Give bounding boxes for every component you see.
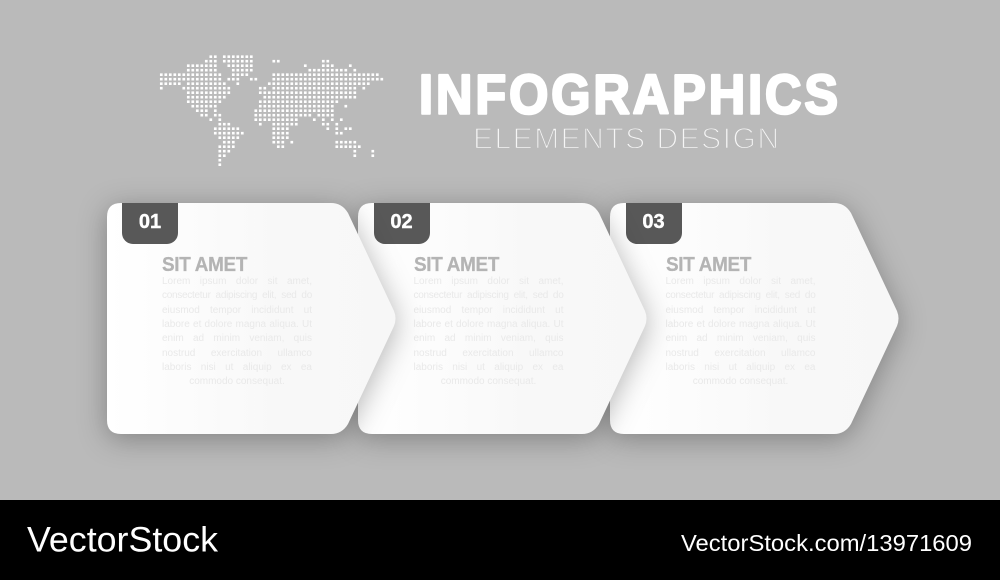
panel: step 03 xyxy=(599,194,910,453)
image url: VectorStock.com/13971609 xyxy=(681,530,972,556)
body text 03: commodo consequat. xyxy=(693,376,788,387)
body text 01: nostrud exercitation ullamco xyxy=(162,348,312,359)
panel: step 01 xyxy=(93,194,409,453)
body text 03: eiusmod tempor incididunt ut xyxy=(666,305,816,316)
body text 03: laboris nisi ut aliquip ex ea xyxy=(666,362,816,373)
body text 03: consectetur adipiscing elit, sed do xyxy=(666,290,816,301)
footer bar xyxy=(0,500,1000,580)
body text 01: Lorem ipsum dolor sit amet, xyxy=(162,276,312,287)
world map xyxy=(160,55,384,166)
body text 01: consectetur adipiscing elit, sed do xyxy=(162,290,312,301)
title: INFOGRAPHICS xyxy=(419,64,841,126)
body text 01: commodo consequat. xyxy=(189,376,285,387)
body text 02: eiusmod tempor incididunt ut xyxy=(414,305,564,316)
body text 02: consectetur adipiscing elit, sed do xyxy=(414,290,564,301)
heading 03: SIT AMET xyxy=(666,253,751,276)
arrow card shape 03 xyxy=(599,194,910,453)
body text 02: nostrud exercitation ullamco xyxy=(414,348,564,359)
arrow card shape 02 xyxy=(347,194,660,453)
number tab 01: 01 xyxy=(139,211,161,233)
body text 02: laboris nisi ut aliquip ex ea xyxy=(414,362,564,373)
brand name: VectorStock xyxy=(27,520,219,560)
number tab 02: 02 xyxy=(390,211,413,233)
body text 02: commodo consequat. xyxy=(441,376,536,387)
body text 03: enim ad minim veniam, quis xyxy=(666,333,816,344)
number tab 03 xyxy=(626,203,682,244)
arrow card shape 01 xyxy=(93,194,409,453)
body text 02 xyxy=(414,276,564,387)
body text 03: Lorem ipsum dolor sit amet, xyxy=(666,276,816,287)
panel: step 02 xyxy=(347,194,660,453)
heading 01: SIT AMET xyxy=(162,253,247,276)
body text 01 xyxy=(162,276,312,387)
subtitle: ELEMENTS DESIGN xyxy=(473,122,779,156)
body text 02: enim ad minim veniam, quis xyxy=(414,333,564,344)
number tab 03: 03 xyxy=(642,211,665,233)
body text 01: labore et dolore magna aliqua. Ut xyxy=(162,319,312,330)
number tab 01 xyxy=(122,203,178,244)
body text 02: Lorem ipsum dolor sit amet, xyxy=(414,276,564,287)
number tab 02 xyxy=(374,203,430,244)
heading 02: SIT AMET xyxy=(414,253,499,276)
body text 01: eiusmod tempor incididunt ut xyxy=(162,305,312,316)
body text 03: nostrud exercitation ullamco xyxy=(666,348,816,359)
body text 02: labore et dolore magna aliqua. Ut xyxy=(414,319,564,330)
body text 01: laboris nisi ut aliquip ex ea xyxy=(162,362,312,373)
body text 03 xyxy=(666,276,816,387)
body text 01: enim ad minim veniam, quis xyxy=(162,333,312,344)
body text 03: labore et dolore magna aliqua. Ut xyxy=(666,319,816,330)
